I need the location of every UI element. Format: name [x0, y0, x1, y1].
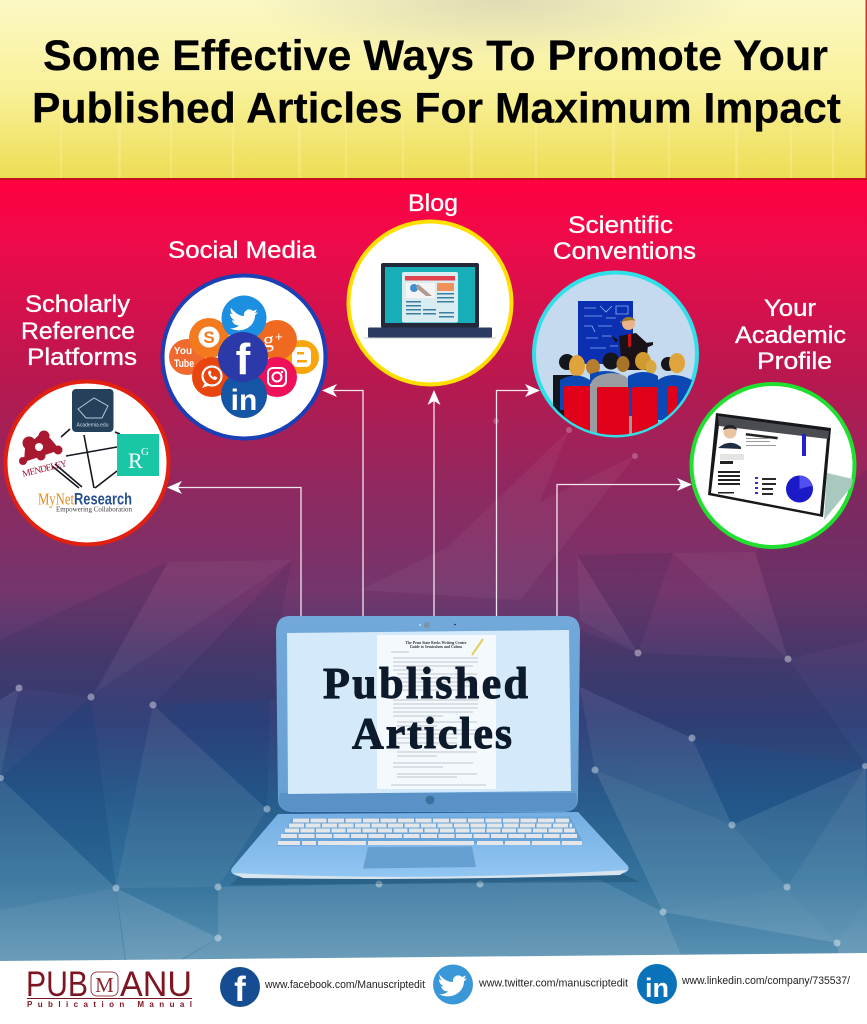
icon: ResearchGate: [117, 434, 159, 476]
social: LinkedIn: in: [645, 973, 669, 1003]
illustration: presenter and audience: [553, 301, 692, 437]
laptop shadow: [230, 873, 640, 885]
label: Scientific Conventions: Conventions: [553, 238, 696, 265]
label: Your Academic Profile: [735, 295, 846, 375]
logo: PubManu: Publication Manual: [27, 1000, 192, 1009]
screen heading: Articles: [352, 709, 512, 758]
audience: [553, 352, 692, 435]
laptop lid: [276, 616, 580, 812]
arrow: to social media: [322, 384, 363, 616]
icon: Instagram: [257, 357, 297, 397]
article page: The Penn State Berks Writing Center: [406, 641, 467, 645]
screen heading: Published: [323, 659, 528, 708]
icon: Academia.edu: Academia.edu: [77, 422, 109, 428]
icon: ResearchGate: R: [128, 448, 143, 473]
blackboard: [578, 301, 633, 364]
keyboard: [277, 816, 583, 846]
title: Published Articles For Maximum Impact: [32, 84, 841, 132]
icon: tablet with profile: [708, 413, 857, 520]
icon: laptop showing blog page: [364, 263, 496, 338]
circle: blog: [348, 222, 512, 384]
title: [32, 32, 841, 132]
circle: your academic profile: [692, 384, 857, 547]
icon: YouTube: [169, 339, 205, 375]
chairs: [564, 386, 677, 437]
logo: MyNetResearch: MyNet: [38, 490, 74, 508]
icon: Google Plus: [257, 320, 297, 360]
label: Scholarly Reference Platforms: [21, 291, 137, 371]
icon: Skype: [189, 318, 229, 358]
icon: Skype: S: [203, 328, 215, 347]
label: Scientific Conventions: [553, 212, 696, 265]
icon: Academia.edu: [72, 389, 114, 432]
icon: Mendeley: [19, 430, 68, 480]
icon: YouTube: Tube: [174, 358, 194, 370]
icon: YouTube: You: [174, 346, 192, 357]
icon: Twitter: [222, 296, 266, 340]
icon: Google Plus: +: [275, 329, 283, 344]
logo: PubManu: ANU: [120, 965, 192, 1004]
arrow: to academic profile: [557, 478, 692, 616]
icon: Facebook: [218, 332, 268, 384]
label: Your Academic Profile: Academic: [735, 322, 846, 349]
social: LinkedIn: [637, 964, 851, 1004]
icon: LinkedIn: [221, 372, 267, 418]
article page: Guide to Semicolons and Colons: [410, 645, 463, 649]
gradient polygon background: [0, 177, 867, 968]
footer bar: [0, 953, 867, 1024]
arrow: to scholarly platforms: [167, 481, 301, 616]
social: Facebook: www.facebook.com/Manuscriptedit: [264, 979, 425, 991]
connecting lines: [52, 429, 120, 488]
circle: scientific conventions: [534, 272, 697, 437]
label: Your Academic Profile: Profile: [757, 348, 832, 375]
label: Blog: Blog: [408, 190, 458, 217]
title: Some Effective Ways To Promote Your: [43, 32, 828, 80]
screen heading: [323, 659, 528, 758]
circle: scholarly reference platforms: [6, 382, 168, 544]
arrow: to blog: [428, 390, 440, 616]
label: Your Academic Profile: Your: [764, 295, 816, 322]
social: LinkedIn: www.linkedin.com/company/735537/: [681, 975, 851, 987]
icon: ResearchGate: G: [141, 446, 149, 458]
icon: Facebook: f: [236, 335, 251, 384]
presenter: [611, 317, 653, 370]
laptop screen: [287, 630, 571, 794]
label: Scholarly Reference Platforms: Reference: [21, 318, 135, 345]
icon: LinkedIn: in: [231, 384, 257, 417]
social: Facebook: [220, 967, 425, 1009]
trackpad: [363, 846, 476, 868]
logo: MyNetResearch: [38, 490, 132, 514]
social: Twitter: www.twitter.com/manuscriptedit: [478, 978, 628, 990]
circle: social media: [162, 276, 326, 438]
webcam: [419, 622, 456, 628]
label: Scholarly Reference Platforms: Platforms: [27, 344, 137, 371]
icon: Blogger: [285, 340, 319, 374]
logo: PubManu: [26, 965, 192, 1009]
logo: MyNetResearch: Research: [74, 490, 132, 508]
logo: PubManu: PUB: [26, 965, 88, 1004]
label: Scholarly Reference Platforms: Scholarly: [25, 291, 130, 318]
hp logo: [426, 796, 434, 804]
logo: PubManu: M: [95, 973, 114, 997]
social: Twitter: [433, 964, 628, 1004]
laptop base: [231, 812, 629, 879]
laptop: published articles: [230, 616, 640, 885]
header banner: [0, 0, 867, 178]
logo: MyNetResearch: Empowering Collaboration: [56, 506, 132, 514]
icon: Google Plus: g: [263, 327, 274, 352]
social: Facebook: f: [234, 970, 246, 1009]
article page: [377, 635, 496, 789]
icon: Mendeley: MENDELEY: [21, 459, 68, 480]
network dots: [0, 418, 867, 946]
icon: WhatsApp: [192, 357, 232, 397]
arrow: to scientific conventions: [496, 384, 540, 616]
label: Scientific Conventions: Scientific: [568, 212, 673, 239]
label: Social Media: Social Media: [168, 237, 317, 264]
